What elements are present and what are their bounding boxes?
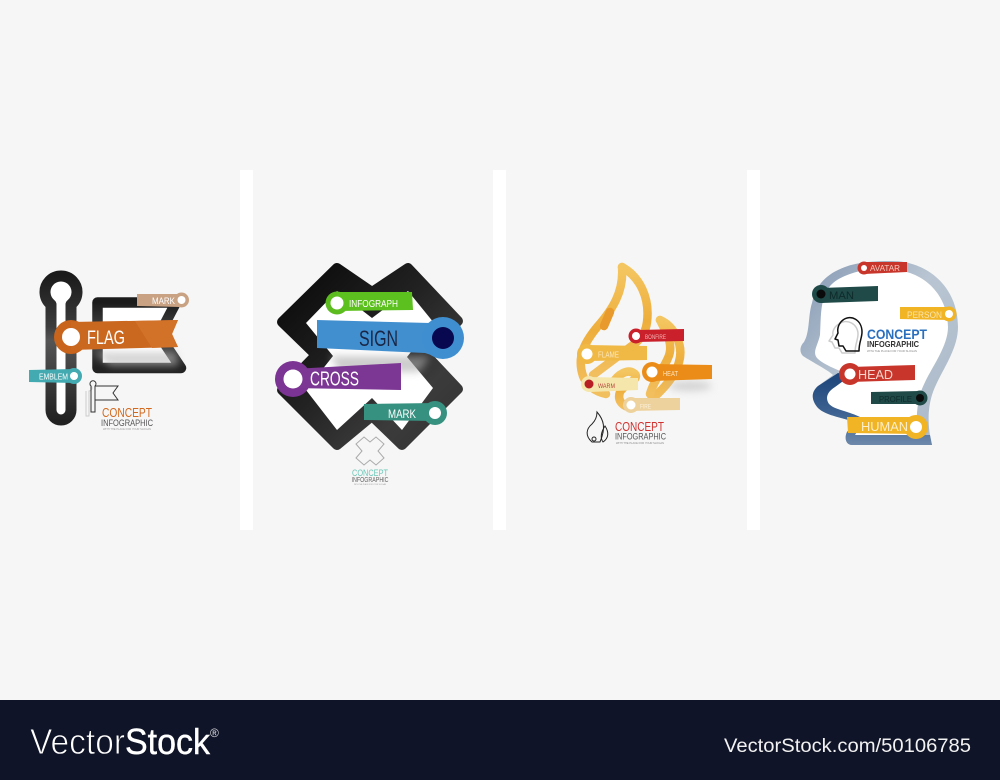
- caption: concept infographic: WITH THE PLACE FOR YOUR SLOGAN: [616, 442, 664, 445]
- flame shaded accent: [604, 312, 610, 326]
- tag: person: PERSON: [907, 310, 942, 320]
- panel: flag: [29, 276, 189, 431]
- white divider strip 2: [493, 170, 506, 530]
- icon: small head: [829, 318, 862, 353]
- tag: fire: FIRE: [640, 404, 651, 410]
- tag: flag: FLAG: [87, 328, 125, 349]
- icon: small flame: [587, 412, 608, 442]
- panel: head: [800, 261, 958, 445]
- tag: infograph: INFOGRAPH: [349, 298, 398, 310]
- logo: VectorStock: [30, 721, 219, 762]
- tag: avatar: [858, 262, 907, 274]
- tag: cross: CROSS: [310, 368, 359, 390]
- tag: sign: SIGN: [359, 326, 398, 351]
- tag: bonfire: [628, 328, 684, 344]
- panel: flame: [577, 267, 712, 445]
- footer bar: [0, 700, 1000, 780]
- tag: sign: [317, 317, 464, 359]
- logo: VectorStock: Stock: [125, 721, 211, 762]
- tag: fire: [623, 397, 680, 413]
- flame line shape: [581, 267, 680, 407]
- flag outline shape: [98, 302, 181, 368]
- icon: small flag: [86, 381, 118, 416]
- caption: concept infographic: CONCEPT: [352, 468, 388, 479]
- tag: person: [900, 306, 956, 322]
- caption: concept infographic: CONCEPT: [615, 420, 664, 434]
- keyhole pole outline: [45, 276, 77, 420]
- tag: mark: MARK: [388, 407, 416, 421]
- cross outline shape: [282, 268, 458, 445]
- tag: mark: [364, 401, 447, 425]
- tag: mark: MARK: [152, 296, 175, 306]
- tag: avatar: AVATAR: [870, 264, 900, 273]
- tag: emblem: [29, 368, 82, 384]
- tag: warm: [581, 376, 638, 392]
- tag: cross: [275, 361, 401, 397]
- tag: bonfire: BONFIRE: [645, 335, 666, 341]
- tag: mark: [137, 292, 189, 308]
- caption: concept infographic: CONCEPT: [102, 406, 152, 420]
- white divider strip 3: [747, 170, 760, 530]
- caption: concept infographic: [101, 406, 153, 431]
- caption: concept infographic: [615, 420, 666, 445]
- tag: man: MAN: [829, 290, 854, 302]
- caption: concept infographic: INFOGRAPHIC: [101, 418, 153, 428]
- tag: human: [847, 415, 928, 439]
- tag: head: [839, 363, 915, 385]
- caption: concept infographic: [352, 468, 388, 486]
- ribbon shadow: [95, 352, 178, 366]
- tag: emblem: EMBLEM: [39, 372, 68, 382]
- panel: cross sign: [275, 268, 464, 486]
- tag: profile: [871, 390, 928, 406]
- caption: concept infographic: WITH THE PLACE FOR YOUR SLOGAN: [354, 483, 386, 486]
- caption: concept infographic: CONCEPT: [867, 326, 927, 342]
- white divider strip 1: [240, 170, 253, 530]
- caption: concept infographic: [867, 326, 927, 353]
- tag: man: [812, 285, 878, 303]
- tag: human: HUMAN: [861, 419, 908, 434]
- caption: concept infographic: INFOGRAPHIC: [615, 432, 666, 442]
- tag: heat: HEAT: [663, 369, 678, 378]
- jaw shading: [813, 373, 932, 445]
- footer image id: VectorStock.com/50106785: [724, 736, 971, 757]
- icon: small cross: [356, 437, 384, 465]
- tag: profile: PROFILE: [879, 394, 912, 404]
- logo: VectorStock: Vector: [30, 721, 125, 762]
- tag: heat: [642, 362, 712, 391]
- tag: flame: FLAME: [598, 350, 619, 360]
- tag: flag: [54, 320, 178, 354]
- tag: flame: [577, 344, 647, 364]
- caption: concept infographic: INFOGRAPHIC: [352, 477, 388, 484]
- tag: infograph: [326, 292, 413, 314]
- ribbon shadows: [330, 356, 430, 372]
- caption: concept infographic: WITH THE PLACE FOR YOUR SLOGAN: [867, 349, 917, 353]
- caption: concept infographic: WITH THE PLACE FOR YOUR SLOGAN: [103, 428, 151, 431]
- tag: head: HEAD: [858, 367, 893, 382]
- tag: warm: WARM: [598, 383, 615, 390]
- head outline shape: [800, 261, 958, 445]
- caption: concept infographic: INFOGRAPHIC: [867, 339, 919, 349]
- logo: VectorStock: ®: [210, 726, 219, 740]
